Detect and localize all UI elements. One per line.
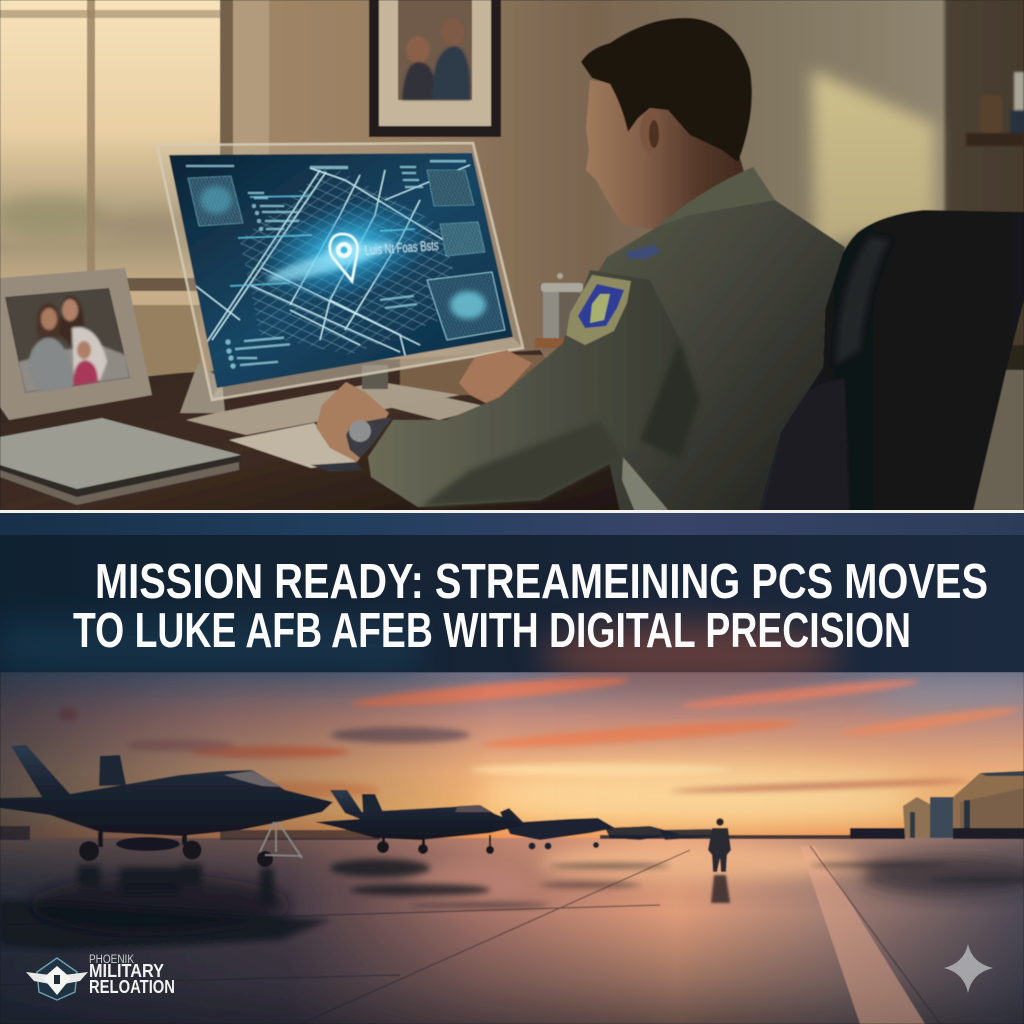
divider — [0, 510, 1024, 513]
panel: sunset airfield — [0, 672, 1024, 1024]
jet: middle — [315, 790, 525, 854]
left hand and watch — [316, 382, 392, 462]
logo text: RELOATION — [89, 977, 175, 997]
screen location label: Luis Nt Foas Bsts — [364, 237, 439, 258]
mini map top right — [427, 170, 474, 206]
mini map lower right — [427, 272, 505, 340]
desk — [0, 350, 640, 512]
coffee tumbler — [535, 273, 583, 348]
panel: office scene — [0, 0, 1024, 512]
pilot — [316, 18, 845, 512]
sleeve — [368, 270, 680, 507]
street map — [195, 164, 471, 356]
banner — [0, 513, 1024, 687]
logo text: PHOENIK — [89, 954, 134, 966]
hangar right — [953, 771, 1024, 839]
hair — [581, 18, 752, 162]
office wall — [0, 0, 1024, 512]
jet reflections — [0, 859, 490, 950]
panel list rows — [186, 160, 466, 369]
mini map top left — [188, 176, 243, 226]
location glow — [262, 202, 428, 298]
jet: foreground — [0, 745, 333, 867]
right hand — [459, 350, 532, 403]
notebook with papers — [0, 418, 241, 505]
torso and shoulder — [563, 167, 845, 512]
icon: sparkle star — [944, 944, 993, 993]
logo — [26, 954, 175, 1000]
banner background — [0, 535, 1024, 687]
map pin — [330, 234, 357, 281]
shelf with objects — [966, 72, 1024, 146]
walking airman — [708, 818, 731, 903]
logo emblem — [26, 958, 88, 1000]
office chair — [757, 210, 1024, 512]
logo text: MILITARY — [89, 961, 164, 981]
sky — [0, 672, 1024, 842]
distant horizon structures — [0, 826, 905, 840]
tarmac — [0, 838, 1024, 1024]
glass reflection bottom edge — [212, 337, 523, 400]
logo text — [89, 954, 175, 997]
shoulder patch — [566, 275, 631, 345]
monitor stand and tablet — [180, 363, 489, 472]
belt strip — [622, 457, 668, 512]
picture frame on desk — [0, 268, 152, 420]
sunlight patch on wall panel — [812, 70, 935, 250]
hangar left — [903, 797, 955, 838]
banner top band — [0, 513, 1024, 535]
info lines — [230, 196, 415, 286]
title — [73, 555, 988, 658]
neck and face — [586, 80, 745, 230]
rank tab — [626, 245, 660, 259]
floor corner — [965, 370, 1024, 510]
distant jets — [500, 808, 725, 850]
framed family photo on wall — [369, 0, 501, 137]
collar — [657, 167, 775, 227]
mini map mid right — [440, 222, 485, 256]
glass display — [157, 143, 523, 400]
window — [0, 0, 269, 375]
